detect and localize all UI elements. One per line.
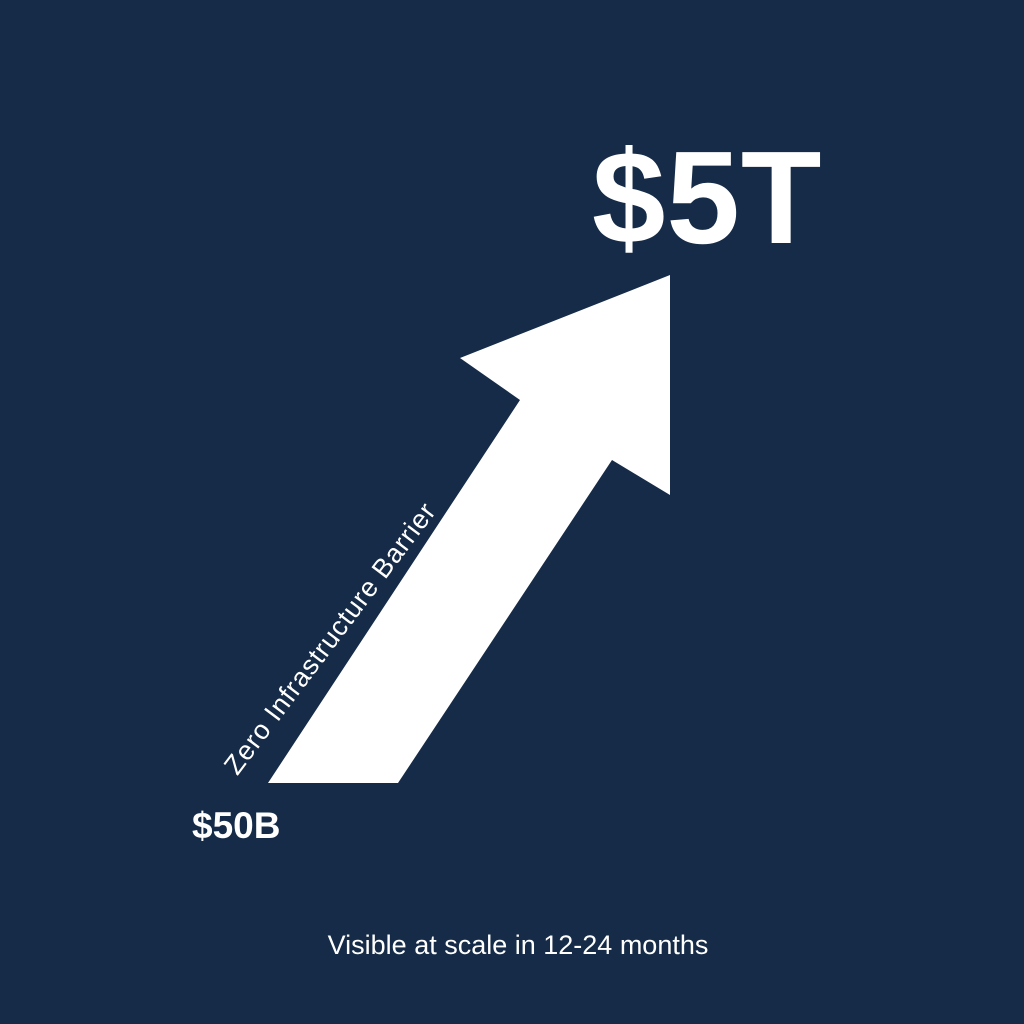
footer note: Visible at scale in 12-24 months [328,930,708,960]
arrow label: Zero Infrastructure Barrier [218,497,442,780]
headline value: $5T: $5T [592,124,822,271]
starting value: $50B: $50B [192,805,280,846]
